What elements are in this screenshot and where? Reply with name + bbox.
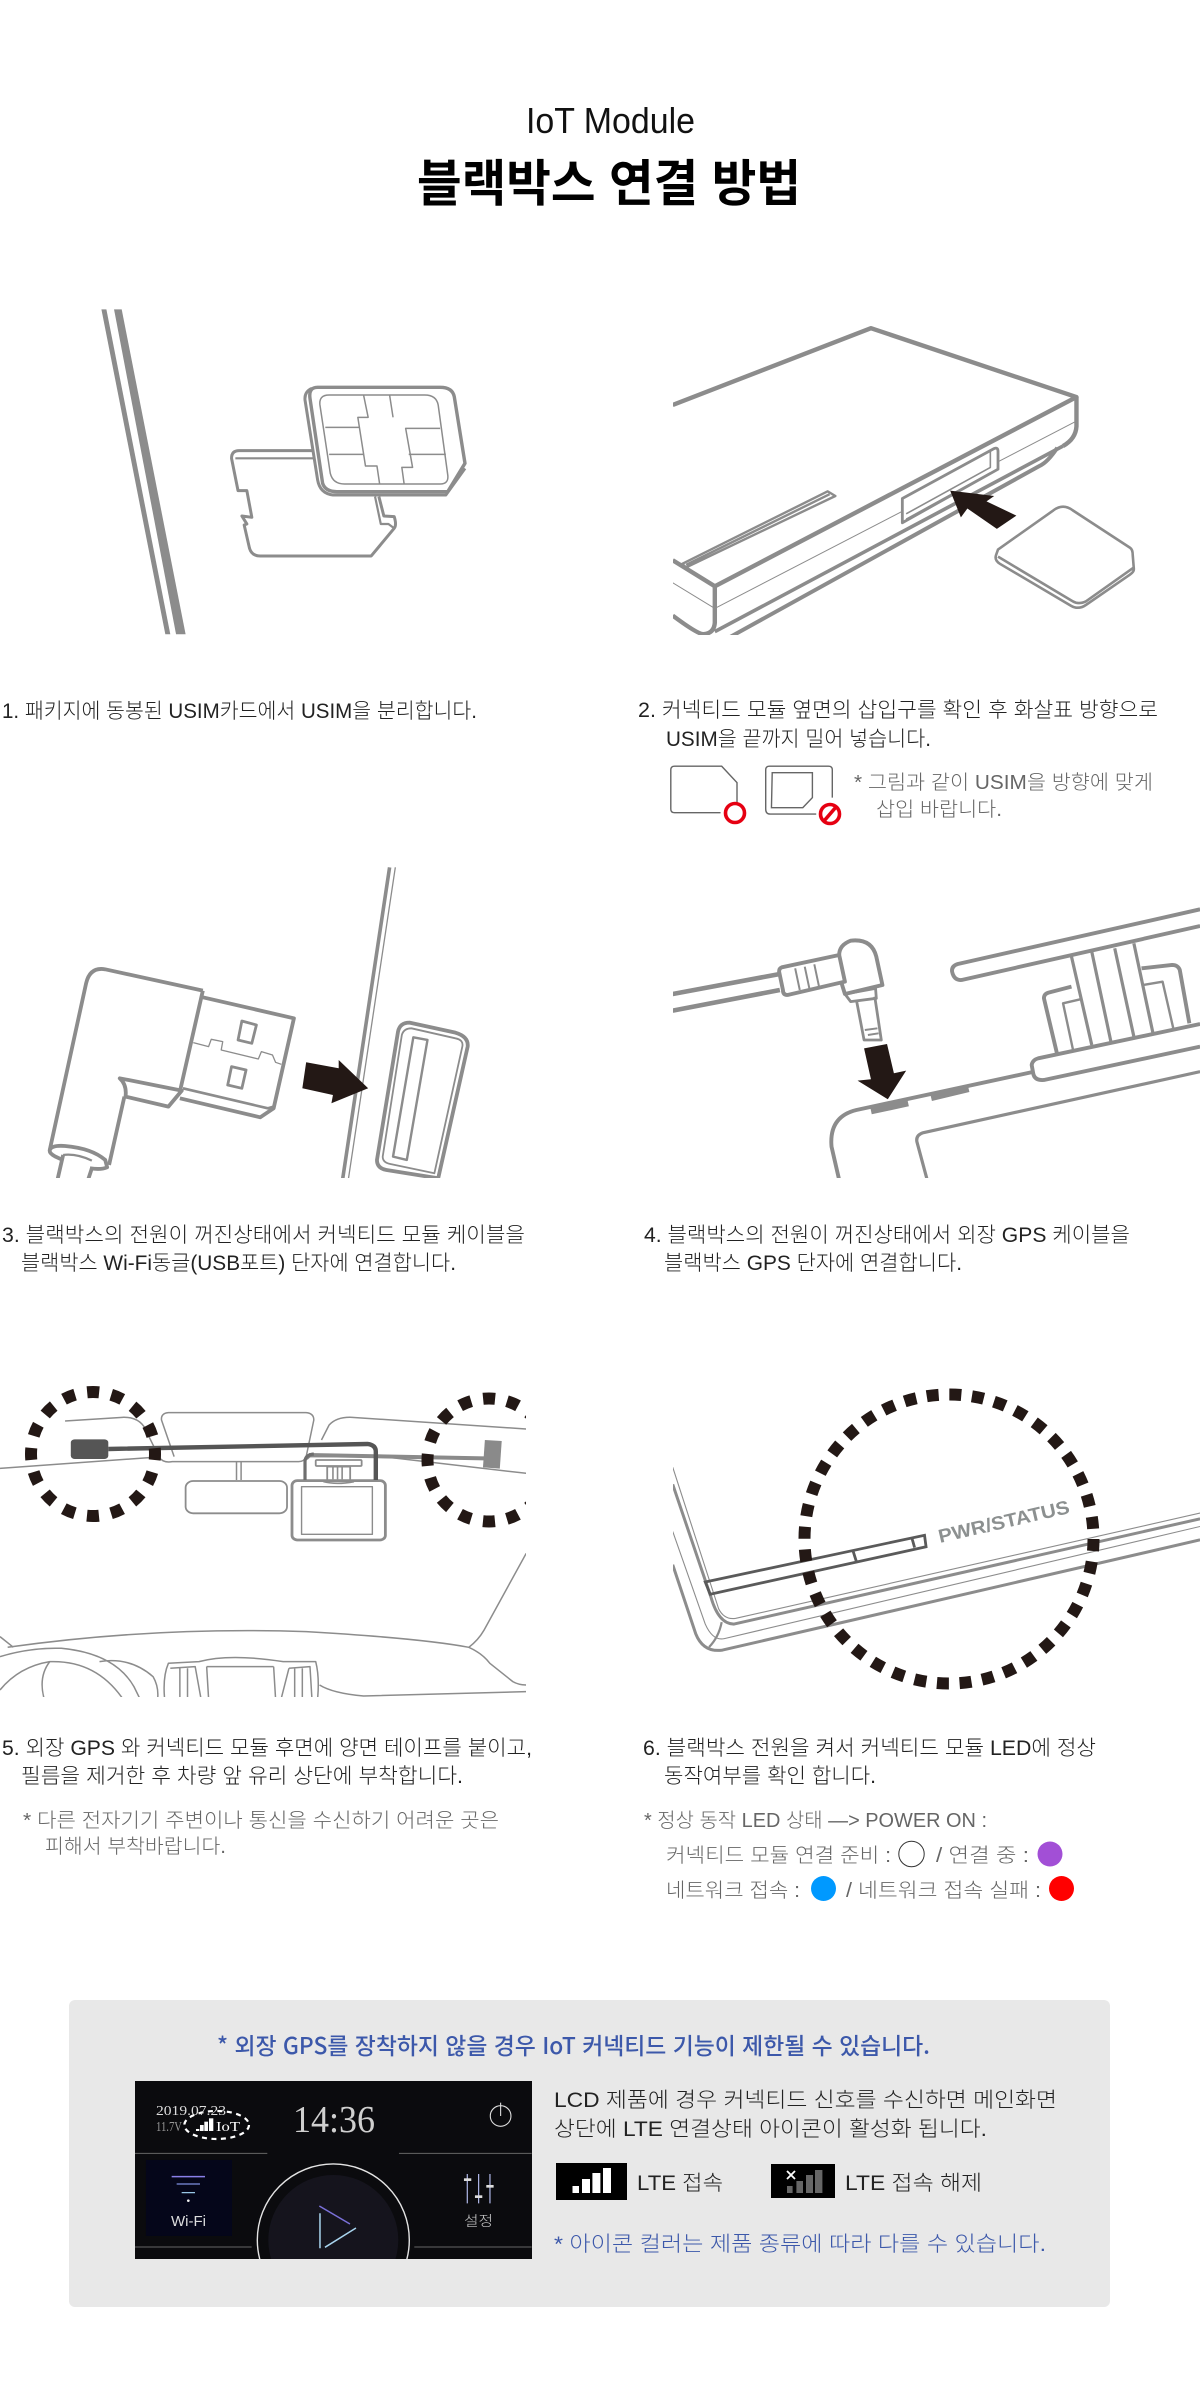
- step 6 LED status legend: 커넥티드 모듈 연결 준비 :: [666, 1844, 891, 1867]
- step 6 text: [643, 1737, 1096, 1788]
- description: 상단에 LTE 연결상태 아이콘이 활성화 됩니다.: [554, 2118, 987, 2141]
- step 5 text: 5. 외장 GPS 와 커넥티드 모듈 후면에 양면 테이프를 붙이고,: [2, 1737, 532, 1760]
- icon: usim card: [996, 507, 1134, 608]
- step 6 LED status legend: [644, 1809, 1074, 1902]
- step 6 LED status legend: / 네트워크 접속 실패 :: [846, 1879, 1041, 1902]
- step 1 text: 1. 패키지에 동봉된 USIM카드에서 USIM을 분리합니다.: [2, 700, 477, 723]
- description: [554, 2089, 1057, 2141]
- LCD main screen: 설정: [464, 2213, 493, 2229]
- step 2 text: USIM을 끝까지 밀어 넣습니다.: [666, 728, 931, 751]
- LCD main screen: IoT: [216, 2120, 241, 2135]
- icon: down arrow: [858, 1044, 906, 1099]
- step 2 text: [638, 699, 1158, 751]
- step 5 text: [2, 1737, 532, 1788]
- panel: LTE icon info: [69, 2000, 1110, 2316]
- label: PWR/STATUS: PWR/STATUS: [936, 1497, 1072, 1548]
- LCD main screen: 14:36: [293, 2099, 375, 2141]
- icon: LTE disconnected: [771, 2164, 835, 2198]
- step 3 illustration: USB connector: [50, 867, 468, 1180]
- step 5 illustration: windshield installation: [0, 1392, 550, 1698]
- step 2 text: 2. 커넥티드 모듈 옆면의 삽입구를 확인 후 화살표 방향으로: [638, 699, 1158, 722]
- step 3 text: 3. 블랙박스의 전원이 꺼진상태에서 커넥티드 모듈 케이블을: [2, 1224, 525, 1247]
- step 2 note: * 그림과 같이 USIM을 방향에 맞게: [854, 771, 1153, 794]
- step 4 text: [644, 1224, 1130, 1275]
- icon: direction arrow: [302, 1060, 368, 1103]
- title: [417, 100, 801, 212]
- step 4 text: 4. 블랙박스의 전원이 꺼진상태에서 외장 GPS 케이블을: [644, 1224, 1130, 1247]
- step 6 text: 6. 블랙박스 전원을 켜서 커넥티드 모듈 LED에 정상: [643, 1737, 1096, 1760]
- LCD main screen: Wi-Fi: [171, 2213, 206, 2230]
- panel heading: * 외장 GPS를 장착하지 않을 경우 IoT 커넥티드 기능이 제한될 수 있습니다.: [217, 2027, 930, 2061]
- LCD main screen: 2019.07.23: [156, 2104, 226, 2119]
- LCD main screen: 11.7V: [156, 2120, 182, 2135]
- step 5 note: 피해서 부착바랍니다.: [45, 1835, 226, 1858]
- icon: insertion arrow: [950, 491, 1016, 529]
- step 3 text: 블랙박스 Wi-Fi동글(USB포트) 단자에 연결합니다.: [21, 1252, 456, 1275]
- step 5 note: * 다른 전자기기 주변이나 통신을 수신하기 어려운 곳은: [23, 1809, 499, 1832]
- LCD main screen: [135, 2081, 532, 2259]
- step 2 wrong usim icon: [766, 766, 840, 824]
- step 5 note: [23, 1809, 499, 1858]
- dashed circle: LED area: [804, 1394, 1094, 1684]
- step 6 illustration: LED status: [673, 1467, 1200, 1650]
- step 5 text: 필름을 제거한 후 차량 앞 유리 상단에 부착합니다.: [21, 1765, 463, 1788]
- step 2 illustration: module slot: [673, 328, 1134, 637]
- step 6 LED status legend: / 연결 중 :: [936, 1844, 1029, 1867]
- step 2 note: 삽입 바랍니다.: [876, 798, 1002, 821]
- step 6 text: 동작여부를 확인 합니다.: [664, 1765, 876, 1788]
- step 1 illustration: USIM card separation: [101, 309, 465, 634]
- dashed circle: module position: [428, 1398, 550, 1522]
- title: 블랙박스 연결 방법: [417, 156, 801, 212]
- step 6 LED status legend: 네트워크 접속 :: [666, 1879, 800, 1902]
- blue note: * 아이콘 컬러는 제품 종류에 따라 다를 수 있습니다.: [554, 2233, 1046, 2256]
- step 4 illustration: GPS cable jack: [673, 909, 1200, 1180]
- step 6 LED status legend: * 정상 동작 LED 상태 —> POWER ON :: [644, 1809, 987, 1832]
- label: LTE connected: LTE 접속: [637, 2172, 723, 2195]
- title: IoT Module: [526, 100, 695, 141]
- description: LCD 제품에 경우 커넥티드 신호를 수신하면 메인화면: [554, 2089, 1057, 2112]
- label: LTE disconnected: LTE 접속 해제: [845, 2172, 982, 2195]
- icon: LTE connected: [556, 2163, 627, 2200]
- step 4 text: 블랙박스 GPS 단자에 연결합니다.: [664, 1252, 962, 1275]
- step 2 correct usim icon: [671, 766, 744, 822]
- dashed circle: GPS position: [31, 1392, 155, 1516]
- step 3 text: [2, 1224, 525, 1275]
- step 2 note: [854, 771, 1153, 821]
